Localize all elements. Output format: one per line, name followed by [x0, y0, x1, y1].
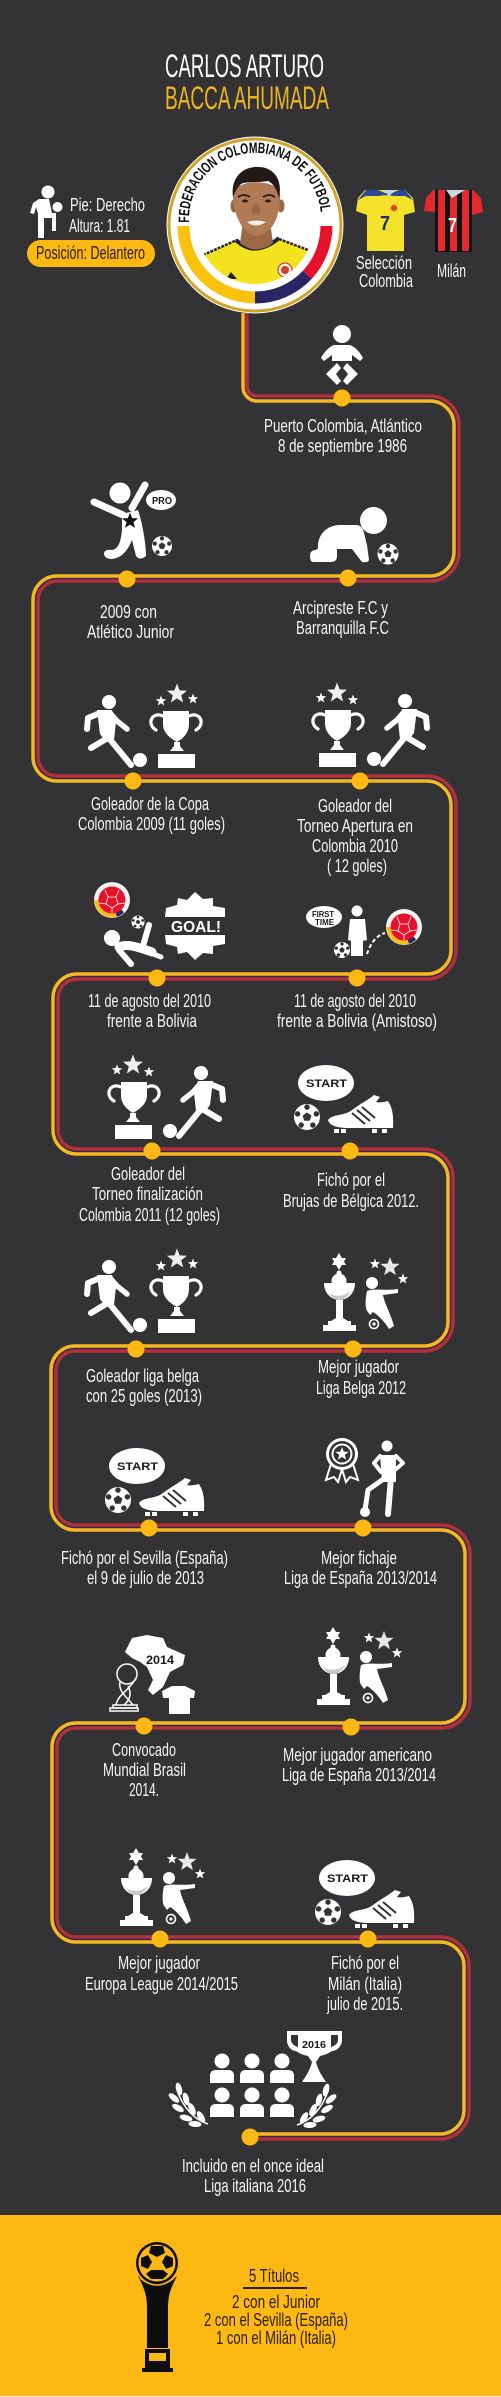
- text: Sevilla: el 9 de julio de 2013: [87, 1567, 204, 1588]
- birth text: [264, 415, 422, 456]
- birth text: 8 de septiembre 1986: [278, 435, 407, 456]
- icon: start boot Sevilla: [105, 1448, 204, 1516]
- icon: start boot Milan: START: [327, 1873, 368, 1885]
- text: once ideal: Incluido en el once ideal: [182, 2155, 324, 2176]
- text: Sevilla: Fichó por el Sevilla (España): [61, 1547, 228, 1568]
- curved federation text: FEDERACION COLOMBIANA DE FUTBOL: [178, 142, 330, 222]
- player stats: Altura: 1.81: [69, 215, 130, 236]
- text: friendly: frente a Bolivia (Amistoso): [277, 1010, 437, 1031]
- position pill: Posición: Delantero: [36, 242, 145, 263]
- icon: first time debut: [306, 906, 422, 958]
- text: debut goal: 11 de agosto del 2010: [88, 990, 211, 1011]
- timeline path: [33, 313, 470, 2139]
- jersey captions: [356, 253, 466, 291]
- text: Milan: Fichó por el: [331, 1952, 399, 1973]
- icon: start boot Milan: [315, 1860, 414, 1928]
- text: mejor jugador Belga: Liga Belga 2012: [316, 1377, 406, 1398]
- icon: best player Belgium: [323, 1253, 408, 1331]
- text: friendly: [277, 990, 437, 1031]
- text: liga belga: Goleador liga belga: [86, 1365, 199, 1386]
- text: Arcipreste: Arcipreste F.C y: [293, 597, 389, 618]
- text: Milan: Milán (Italia): [328, 1973, 402, 1994]
- titles text: 2 con el Junior: [232, 2291, 320, 2312]
- text: mejor jugador americano: [282, 1744, 436, 1785]
- text: Arcipreste: Barranquilla F.C: [296, 617, 389, 638]
- icon: Brazil 2014: 2014: [146, 1655, 175, 1667]
- text: debut goal: [88, 990, 211, 1031]
- title: [165, 48, 329, 116]
- text: Mundial Brasil: Mundial Brasil: [103, 1759, 186, 1780]
- text: Arcipreste: [293, 597, 389, 638]
- icon: scorer and trophy 2009: [87, 684, 201, 768]
- text: friendly: 11 de agosto del 2010: [294, 990, 416, 1011]
- icon: black ball trophy: [136, 2242, 178, 2372]
- text: liga belga: con 25 goles (2013): [86, 1385, 202, 1406]
- text: Copa Colombia: Goleador de la Copa: [91, 793, 209, 814]
- player photo: [204, 166, 308, 284]
- icon: baby: [321, 325, 363, 385]
- icon: best American player: [317, 1627, 402, 1705]
- timeline dots: [118, 390, 376, 2146]
- text: Milan: [326, 1952, 403, 2014]
- icon: trophy and scorer 2011: [109, 1054, 223, 1139]
- icon: professional player: PRO: [152, 496, 172, 507]
- icon: first time debut: TIME: [315, 918, 335, 927]
- player stats: [69, 194, 145, 236]
- icon: Brazil 2014: [110, 1635, 195, 1714]
- icon: start boot Brujas: START: [306, 1078, 347, 1090]
- text: 2009 Junior: 2009 con: [100, 601, 157, 622]
- text: Torneo Apertura: Goleador del: [318, 795, 392, 816]
- text: Europa League: [85, 1952, 238, 1994]
- icon: start boot Brujas: [294, 1065, 393, 1133]
- birth text: Puerto Colombia, Atlántico: [264, 415, 422, 436]
- panel: titles band: [0, 2215, 501, 2396]
- icon: medal and player: [326, 1438, 403, 1517]
- text: Brujas: Fichó por el: [317, 1169, 385, 1190]
- jersey: Colombia: 7: [380, 213, 390, 235]
- text: 2009 Junior: Atlético Junior: [87, 621, 174, 642]
- icon: bicycle kick goal: [94, 882, 225, 964]
- text: Europa League: Europa League 2014/2015: [85, 1973, 238, 1994]
- icon: first time debut: FIRST: [312, 910, 334, 919]
- text: debut goal: frente a Bolivia: [107, 1010, 198, 1031]
- titles text: [204, 2265, 348, 2348]
- jersey: Milan: [424, 190, 483, 252]
- text: 2009 Junior: [87, 601, 174, 642]
- player stats: Pie: Derecho: [70, 194, 145, 215]
- position pill: [27, 240, 155, 267]
- text: Sevilla: [61, 1547, 228, 1588]
- text: mejor jugador americano: Liga de España 2013/2014: [282, 1764, 436, 1785]
- icon: Europa League best player: [120, 1848, 205, 1926]
- text: mejor fichaje: [284, 1547, 437, 1588]
- jersey captions: Colombia: [359, 271, 414, 291]
- text: Torneo Apertura: [297, 795, 413, 876]
- bottom edge: [0, 2396, 501, 2397]
- text: liga belga: [86, 1365, 202, 1406]
- icon: trophy and scorer 2010: [313, 682, 427, 767]
- text: Brujas: [283, 1169, 419, 1211]
- icon: start boot Sevilla: START: [117, 1461, 158, 1473]
- text: once ideal: [182, 2155, 324, 2196]
- portrait badge: [166, 136, 344, 314]
- text: Torneo Apertura: ( 12 goles): [327, 855, 387, 876]
- text: Torneo finalizacion: [79, 1163, 220, 1225]
- title: CARLOS ARTURO: [165, 48, 324, 84]
- icon: professional player: [94, 482, 176, 559]
- icon: ideal eleven: [167, 2031, 342, 2129]
- text: mejor jugador Belga: Mejor jugador: [318, 1356, 399, 1377]
- titles text: 1 con el Milán (Italia): [216, 2327, 336, 2348]
- icon: bicycle kick goal: GOAL!: [171, 919, 221, 936]
- jersey captions: Selección: [356, 253, 412, 273]
- text: Milan: julio de 2015.: [326, 1993, 403, 2014]
- text: mejor jugador Belga: [316, 1356, 406, 1398]
- text: Mundial Brasil: Convocado: [112, 1739, 176, 1760]
- jersey: Colombia: [356, 190, 415, 251]
- titles text: 5 Títulos: [249, 2265, 299, 2286]
- icon: scorer and trophy 2013: [87, 1248, 201, 1333]
- text: Torneo Apertura: Colombia 2010: [312, 835, 398, 856]
- text: Torneo Apertura: Torneo Apertura en: [297, 815, 413, 836]
- text: Torneo finalizacion: Goleador del: [111, 1163, 185, 1184]
- ring arcs: flag colours: [184, 226, 326, 298]
- text: Brujas: Brujas de Bélgica 2012.: [283, 1190, 419, 1211]
- jersey: Milan: 7: [448, 215, 457, 237]
- text: Torneo finalizacion: Torneo finalización: [92, 1183, 203, 1204]
- text: Copa Colombia: [78, 793, 225, 834]
- title: BACCA AHUMADA: [165, 80, 329, 116]
- icon: ideal eleven: 2016: [302, 2040, 326, 2051]
- text: Copa Colombia: Colombia 2009 (11 goles): [78, 813, 225, 834]
- text: Europa League: Mejor jugador: [118, 1952, 200, 1973]
- text: mejor jugador americano: Mejor jugador americano: [283, 1744, 432, 1765]
- text: mejor fichaje: Mejor fichaje: [321, 1547, 397, 1568]
- icon: crawling baby: [310, 507, 398, 564]
- icon: player juggling ball: [30, 186, 62, 238]
- text: Mundial Brasil: 2014.: [129, 1779, 159, 1800]
- titles text: 2 con el Sevilla (España): [204, 2309, 348, 2330]
- text: mejor fichaje: Liga de España 2013/2014: [284, 1567, 437, 1588]
- text: Torneo finalizacion: Colombia 2011 (12 goles): [79, 1204, 220, 1225]
- text: once ideal: Liga italiana 2016: [204, 2175, 306, 2196]
- jersey captions: Milán: [437, 261, 466, 281]
- text: Mundial Brasil: [103, 1739, 186, 1800]
